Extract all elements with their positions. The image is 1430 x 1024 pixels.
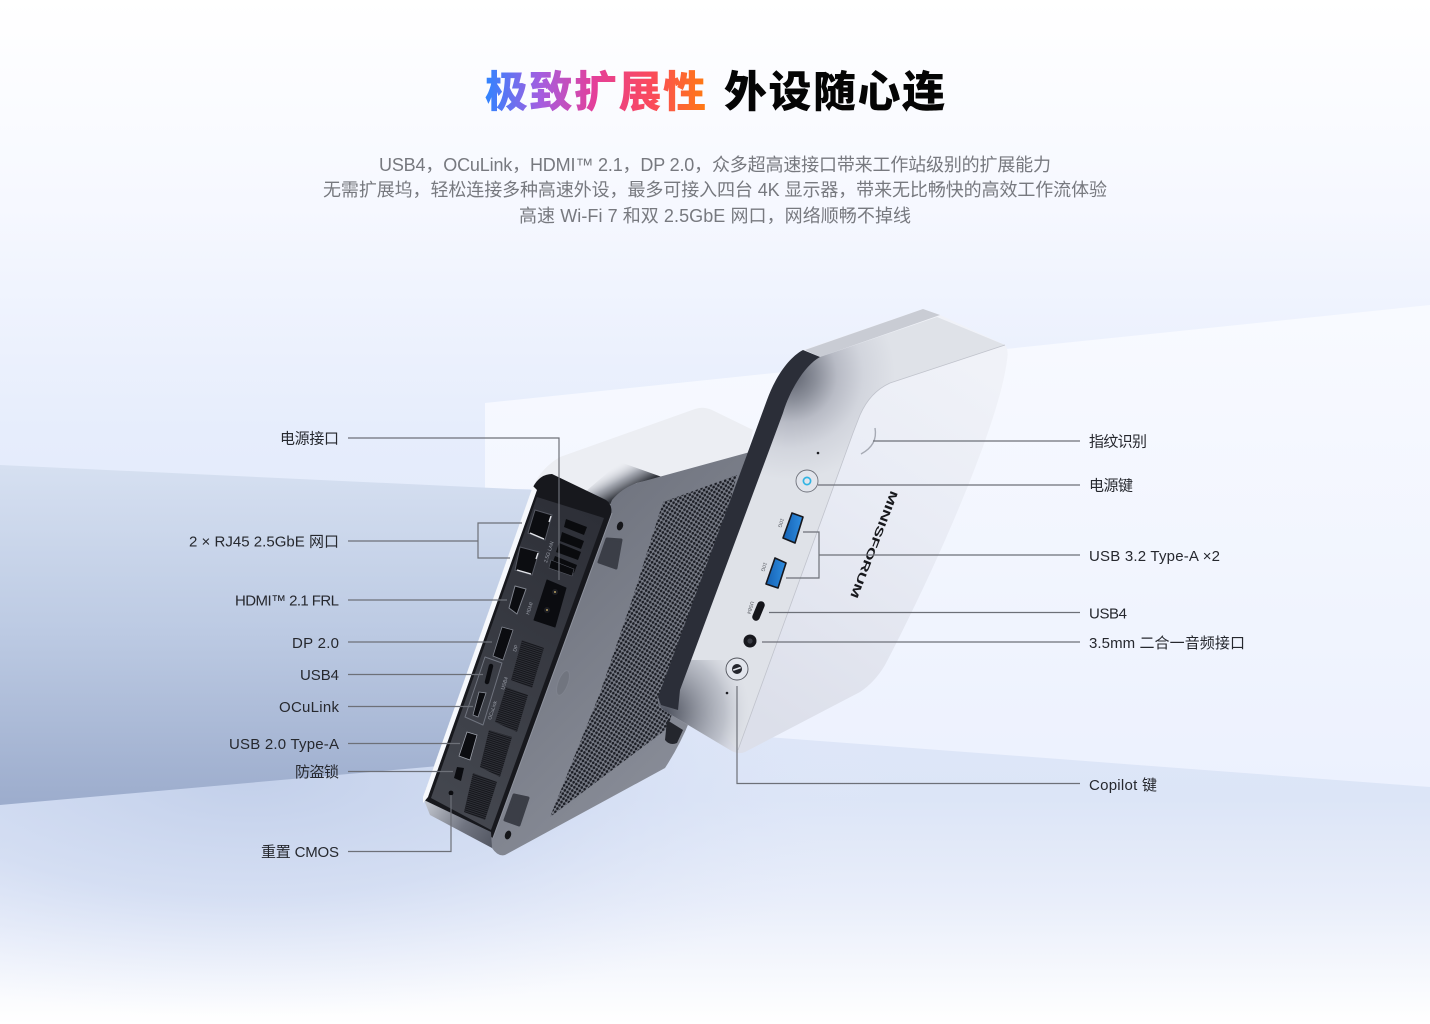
fingerprint sensor: [861, 428, 875, 454]
callout: USB 3.2: [786, 532, 1220, 578]
rubber feet: [505, 539, 621, 825]
rear port panel: [424, 474, 611, 838]
port legends: OCuLink: [487, 700, 499, 721]
front port legends: 10G: [776, 517, 785, 528]
subtitle text block: USB4，OCuLink，HDMI™ 2.1，DP 2.0，众多超高速接口带来工作站级别的扩展能力: [379, 155, 1051, 175]
front port legends: 10G: [759, 561, 768, 572]
reset hole: [449, 791, 453, 795]
OCuLink port: [473, 692, 486, 717]
USB 2.0 port: [459, 732, 477, 760]
callout: CMOS: [261, 795, 451, 861]
panel seam: [738, 345, 1005, 750]
device: front view mini PC: [658, 309, 1008, 753]
subtitle text block: 无需扩展坞，轻松连接多种高速外设，最多可接入四台 4K 显示器，带来无比畅快的高效工作流体验: [323, 180, 1107, 200]
port legends: [487, 541, 556, 721]
lower metal corner: [658, 660, 770, 752]
callout: USB 2.0: USB 2.0 Type-A: [229, 736, 339, 753]
main body: [658, 309, 1008, 753]
USB4 / OCuLink frame: [465, 657, 502, 725]
callout: Copilot: Copilot 键: [1089, 777, 1157, 794]
callout: 电源接口: [280, 430, 559, 580]
lower foot: [665, 720, 683, 744]
front port legends: USB4: [745, 600, 755, 615]
title: [485, 58, 945, 120]
port legends: HDMI: [525, 602, 535, 616]
screw holes: [504, 521, 624, 840]
dark band: [658, 350, 820, 710]
USB 3.2 Type-A upper: [783, 513, 803, 543]
callout: CMOS: 重置 CMOS: [261, 844, 339, 861]
metal front panel with upper corner: [680, 317, 1005, 750]
callout: fingerprint: 指纹识别: [1089, 434, 1147, 450]
power inlet: [534, 580, 566, 627]
title: 极致扩展性: [485, 58, 706, 120]
bottom gray face: [480, 452, 750, 855]
subtitle text block: [323, 155, 1107, 226]
audio jack: [744, 634, 756, 648]
oval badge: [554, 669, 572, 697]
callout: 电源接口: 电源接口: [280, 430, 339, 448]
panel edge highlight: [493, 513, 612, 838]
device: rear view mini PC: [423, 408, 753, 855]
callout: HDMI: HDMI™ 2.1 FRL: [235, 592, 339, 610]
title: 外设随心连: [724, 58, 945, 120]
inner rear face: [431, 497, 604, 830]
DP port: [493, 627, 513, 660]
USB4 Type-C: [756, 605, 761, 617]
callout: power key: 电源键: [1089, 478, 1133, 494]
callout: USB 3.2: USB 3.2 Type-A ×2: [1089, 548, 1220, 565]
RJ45 ports: [515, 510, 552, 575]
power button: [796, 470, 818, 492]
perforated vent area: [550, 475, 737, 817]
callout: OCuLink: OCuLink: [279, 699, 340, 716]
port legends: USB4: [500, 676, 510, 691]
callout: USB4 rear: USB4: [300, 667, 339, 684]
Copilot button: [726, 658, 748, 680]
port legends: DP: [512, 644, 520, 653]
white left edge: [423, 486, 537, 803]
callout: USB4 front: USB4: [1089, 606, 1127, 622]
callout: DP: DP 2.0: [292, 635, 339, 652]
top side strip: [805, 309, 940, 357]
side wall corner shading: [585, 462, 662, 505]
callout: lock: 防盗锁: [295, 764, 339, 781]
USB 3.2 Type-A lower: [766, 558, 786, 588]
callout: RJ45: 2 × RJ45 2.5GbE 网口: [189, 534, 339, 550]
callout: audio: 3.5mm 二合一音频接口: [1089, 635, 1245, 652]
callout: RJ45: [189, 523, 522, 558]
indicator dots: [726, 452, 819, 694]
HDMI port: [509, 586, 526, 614]
callout: Copilot: [737, 686, 1157, 794]
lower silver rim: [424, 800, 492, 848]
lock slot: [454, 767, 464, 781]
front port legends: [745, 517, 785, 615]
white side wall: [533, 408, 753, 505]
port legends: 2.5G LAN: [543, 541, 556, 564]
vent slots: [549, 519, 587, 576]
cooling grilles: [464, 640, 544, 820]
USB4 port: [487, 666, 491, 682]
subtitle text block: 高速 Wi-Fi 7 和双 2.5GbE 网口，网络顺畅不掉线: [519, 206, 911, 226]
logo: MINISFORUM: [847, 489, 899, 600]
